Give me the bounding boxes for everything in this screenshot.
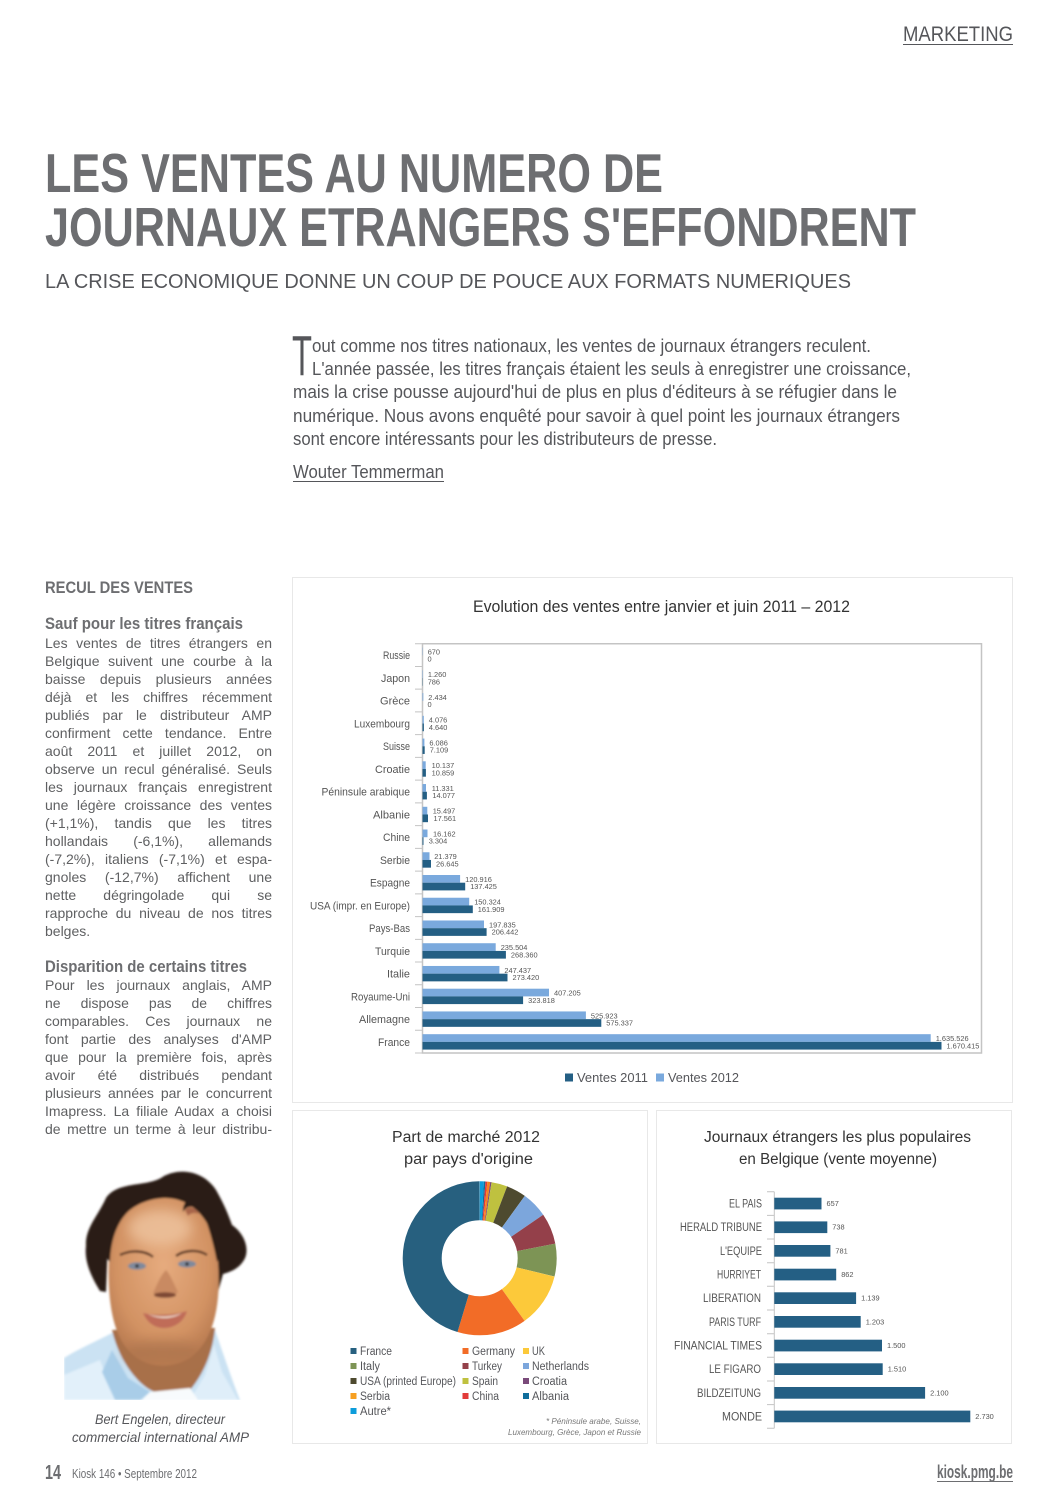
row: Espagne <box>370 875 497 891</box>
row: Peninsule arabique: Péninsule arabique <box>322 787 410 799</box>
bar chart: ventes moyennes: 1.203 <box>866 1317 884 1326</box>
text block: sauf pour les titres francais: août 2011 et juillet 2012, on <box>45 743 272 759</box>
bar chart: ventes moyennes <box>674 1192 994 1428</box>
text block: sauf pour les titres francais: (-7,2%), italiens (-7,1%) et espa- <box>45 851 272 867</box>
text block: sauf pour les titres francais: déjà et les chiffres récemment <box>45 689 272 705</box>
text block: sauf pour les titres francais: Belgique suivent une courbe à la <box>45 653 272 669</box>
bar chart: ventes moyennes: 1.500 <box>887 1341 906 1350</box>
subheading: disparition de certains titres: Disparition de certains titres <box>45 957 247 976</box>
portrait photo <box>64 1172 247 1400</box>
chart title: Evolution des ventes entre janvier et juin 2011 – 2012 <box>473 598 850 616</box>
shirt <box>64 1330 240 1400</box>
row: Luxembourg: 4.076 <box>429 716 447 725</box>
row: Suisse: 6.086 <box>429 738 448 747</box>
row: USA <box>310 898 505 914</box>
footer: website link: kiosk.pmg.be <box>937 1462 1013 1482</box>
row: Albanie: Albanie <box>373 809 410 821</box>
row: Allemagne: 575.337 <box>606 1019 633 1028</box>
bar chart: ventes moyennes: 781 <box>835 1246 848 1255</box>
row: Turquie: Turquie <box>375 946 410 958</box>
footnote <box>508 1416 641 1437</box>
text block: sauf pour les titres francais: belges. <box>45 923 90 939</box>
row: Croatie: Croatie <box>375 764 410 776</box>
photo caption: commercial international AMP <box>72 1429 250 1445</box>
subtitle: LA CRISE ECONOMIQUE DONNE UN COUP DE POUCE AUX FORMATS NUMERIQUES <box>45 270 851 293</box>
donut legend: USA (printed Europe) <box>360 1376 456 1388</box>
row: Allemagne <box>359 1011 633 1028</box>
footer: page number and issue <box>45 1462 197 1484</box>
row: Croatie: 10.859 <box>432 768 454 777</box>
nose <box>154 1270 178 1294</box>
row: Japon <box>381 670 446 686</box>
panel: evolution des ventes <box>292 578 1012 1102</box>
row: Grece: 2.434 <box>428 693 447 702</box>
panel: part de marche <box>292 1110 648 1444</box>
text block: sauf pour les titres francais: les journaux français enregistrent <box>45 779 272 795</box>
row: Turquie: 235.504 <box>501 943 527 952</box>
row: Croatie <box>375 761 454 777</box>
text block: disparition de certains titres: ne dispose pas de chiffres <box>45 995 272 1011</box>
text block: sauf pour les titres francais: baisse depuis plusieurs années <box>45 671 272 687</box>
row: Italie: 273.420 <box>512 973 539 982</box>
row: Serbie <box>380 852 459 868</box>
photo caption <box>72 1411 250 1445</box>
chart title: Journaux étrangers les plus populaires <box>704 1129 971 1146</box>
intro paragraph: mais la crise pousse aujourd'hui de plus en plus d'éditeurs à se réfugier dans le <box>293 381 897 402</box>
text block: sauf pour les titres francais: observe un recul généralisé. Seuls <box>45 761 272 777</box>
text block: disparition de certains titres: plusieurs années par le concurrent <box>45 1085 272 1101</box>
text block: sauf pour les titres francais: rapproche du niveau de nos titres <box>45 905 272 921</box>
bar chart: ventes moyennes: FINANCIAL TIMES <box>674 1340 762 1352</box>
row: Japon: 786 <box>428 677 440 686</box>
row: Peninsule arabique: 14.077 <box>432 791 455 800</box>
subheading: sauf pour les titres francais: Sauf pour les titres français <box>45 614 243 633</box>
row: Espagne: 120.916 <box>465 875 492 884</box>
donut legend: Turkey <box>472 1361 502 1373</box>
text block: disparition de certains titres: que pour la première fois, après <box>45 1049 272 1065</box>
chart legend <box>565 1070 739 1085</box>
chart title: Part de marché 2012 <box>392 1129 540 1146</box>
row: Royaume-Uni: Royaume-Uni <box>351 991 410 1003</box>
footnote: Luxembourg, Grèce, Japon et Russie <box>508 1427 641 1437</box>
donut legend: Italy <box>360 1361 380 1373</box>
bar chart: ventes moyennes: 738 <box>832 1223 845 1232</box>
intro paragraph: L'année passée, les titres français étaient les seuls à enregistrer une croissance, <box>312 358 911 379</box>
author byline: Wouter Temmerman <box>293 461 444 482</box>
row: Royaume-Uni: 407.205 <box>554 989 581 998</box>
panel: journaux les plus populaires <box>656 1110 1012 1444</box>
donut legend: Albania <box>532 1391 570 1403</box>
row: Suisse: Suisse <box>383 741 410 753</box>
chart title: en Belgique (vente moyenne) <box>739 1151 937 1168</box>
row: Espagne: 137.425 <box>470 882 497 891</box>
row: Turquie: 268.360 <box>511 950 538 959</box>
bar chart: ventes moyennes: EL PAIS <box>729 1198 762 1210</box>
text block: sauf pour les titres francais: gnoles (-12,7%) affichent une <box>45 869 272 885</box>
text block: disparition de certains titres: font partie des analyses d'AMP <box>45 1031 272 1047</box>
row: France: France <box>378 1037 410 1049</box>
mouth <box>143 1311 187 1328</box>
text block: sauf pour les titres francais: une légère croissance des ventes <box>45 797 272 813</box>
bar chart: ventes moyennes: HURRIYET <box>717 1270 761 1282</box>
row: Grece: Grèce <box>380 696 410 708</box>
row: Russie <box>383 648 440 664</box>
row: Peninsule arabique: 11.331 <box>432 784 454 793</box>
row: Japon: 1.260 <box>428 670 446 679</box>
bar chart: ventes moyennes: 2.730 <box>975 1412 994 1421</box>
footer: page number and issue: 14 <box>45 1462 62 1484</box>
text block: sauf pour les titres francais: hollandais (-6,1%), allemands <box>45 833 272 849</box>
row: Serbie: Serbie <box>380 855 410 867</box>
row: Pays-Bas <box>369 920 518 937</box>
text block: disparition de certains titres: de mettre un terme à leur distribu- <box>45 1121 272 1137</box>
row: Royaume-Uni: 323.818 <box>528 996 555 1005</box>
text block: disparition de certains titres: avoir été distribués pendant <box>45 1067 272 1083</box>
text block: sauf pour les titres francais: (+1,1%), tandis que les titres <box>45 815 272 831</box>
row: Chine: 16.162 <box>433 829 456 838</box>
bar chart: ventes par pays <box>310 644 982 1053</box>
text block: sauf pour les titres francais: nette dégringolade qui se <box>45 887 272 903</box>
hair <box>86 1172 247 1292</box>
donut legend <box>350 1346 589 1418</box>
donut legend: Netherlands <box>532 1361 589 1373</box>
row: Allemagne: Allemagne <box>359 1014 410 1026</box>
chart legend: Ventes 2011 <box>577 1070 648 1085</box>
donut chart <box>422 1201 537 1316</box>
eyes <box>128 1262 146 1270</box>
row: Luxembourg: 4.640 <box>429 723 447 732</box>
footnote: * Péninsule arabe, Suisse, <box>546 1416 641 1426</box>
intro paragraph: out comme nos titres nationaux, les ventes de journaux étrangers reculent. <box>312 335 871 356</box>
row: France <box>378 1034 979 1050</box>
row: Chine <box>383 829 456 846</box>
neck <box>112 1328 215 1392</box>
row: Chine: 3.304 <box>429 837 447 846</box>
row: USA: 161.909 <box>478 905 505 914</box>
row: Italie: Italie <box>387 969 410 981</box>
row: Pays-Bas: Pays-Bas <box>369 923 410 935</box>
row: Croatie: 10.137 <box>432 761 454 770</box>
row: Peninsule arabique <box>322 784 455 800</box>
row: Grece: 0 <box>428 700 432 709</box>
row: Turquie <box>375 943 538 959</box>
row: Japon: Japon <box>381 673 410 685</box>
intro paragraph <box>292 324 911 449</box>
row: Royaume-Uni <box>351 989 581 1005</box>
row: USA: USA (impr. en Europe) <box>310 900 410 912</box>
bar chart: ventes moyennes: LIBERATION <box>703 1293 761 1305</box>
donut legend: Autre* <box>360 1406 392 1418</box>
donut legend: Germany <box>472 1346 515 1358</box>
row: Suisse <box>383 738 448 755</box>
row: USA: 150.324 <box>474 898 501 907</box>
bar chart: ventes moyennes: 862 <box>841 1270 854 1279</box>
chart title <box>704 1129 971 1168</box>
photo caption: Bert Engelen, directeur <box>95 1411 226 1427</box>
row: Russie: Russie <box>383 650 410 662</box>
row: Allemagne: 525.923 <box>591 1011 618 1020</box>
text block: sauf pour les titres francais: publiés par le distributeur AMP <box>45 707 272 723</box>
intro paragraph: T <box>292 324 312 388</box>
row: Pays-Bas: 197.835 <box>489 920 516 929</box>
row: Italie: 247.437 <box>504 966 531 975</box>
row: Serbie: 21.379 <box>434 852 457 861</box>
row: France: 1.635.526 <box>936 1034 969 1043</box>
text block: disparition de certains titres: comparables. Ces journaux ne <box>45 1013 272 1029</box>
row: Russie: 0 <box>428 655 432 664</box>
donut legend: China <box>472 1391 500 1403</box>
bar chart: ventes moyennes: 2.100 <box>930 1388 949 1397</box>
row: Albanie <box>373 807 456 823</box>
row: Espagne: Espagne <box>370 878 410 890</box>
chart title: par pays d'origine <box>404 1151 533 1168</box>
section label: marketing: MARKETING <box>903 23 1013 46</box>
row: Chine: Chine <box>383 832 410 844</box>
bar chart: ventes moyennes: 1.510 <box>888 1365 906 1374</box>
row: Italie <box>387 966 539 982</box>
donut legend: Spain <box>472 1376 498 1388</box>
donut legend: Croatia <box>532 1376 568 1388</box>
text block: disparition de certains titres <box>45 977 272 1137</box>
row: Serbie: 26.645 <box>436 859 459 868</box>
intro paragraph: numérique. Nous avons enquêté pour savoir à quel point les journaux étrangers <box>293 405 900 426</box>
text block: sauf pour les titres francais <box>45 635 272 939</box>
bar chart: ventes moyennes: MONDE <box>722 1411 762 1423</box>
row: Suisse: 7.109 <box>430 746 448 755</box>
title <box>45 142 916 258</box>
row: France: 1.670.415 <box>946 1041 979 1050</box>
bar chart: ventes moyennes: 657 <box>826 1199 839 1208</box>
intro paragraph: sont encore intéressants pour les distributeurs de presse. <box>293 428 717 449</box>
face <box>109 1198 219 1366</box>
row: Luxembourg <box>354 716 447 732</box>
row: Albanie: 17.561 <box>434 814 456 823</box>
row: Albanie: 15.497 <box>433 807 455 816</box>
bar chart: ventes moyennes: L'EQUIPE <box>720 1246 762 1258</box>
text block: sauf pour les titres francais: Les ventes de titres étrangers en <box>45 635 272 651</box>
text block: disparition de certains titres: Pour les journaux anglais, AMP <box>45 977 272 993</box>
row: Pays-Bas: 206.442 <box>492 928 518 937</box>
bar chart: ventes moyennes: HERALD TRIBUNE <box>680 1222 762 1234</box>
chart legend: Ventes 2012 <box>668 1070 739 1085</box>
text block: disparition de certains titres: Imapress. La filiale Audax a choisi <box>45 1103 272 1119</box>
text block: sauf pour les titres francais: confirment cette tendance. Entre <box>45 725 272 741</box>
bar chart: ventes moyennes: PARIS TURF <box>709 1317 761 1329</box>
bar chart: ventes moyennes: LE FIGARO <box>709 1364 761 1376</box>
title: LES VENTES AU NUMERO DE <box>45 142 663 204</box>
row: Luxembourg: Luxembourg <box>354 718 410 730</box>
bar chart: ventes moyennes: 1.139 <box>861 1294 880 1303</box>
hair curl on forehead <box>183 1196 221 1262</box>
footer: page number and issue: Kiosk 146 • Septembre 2012 <box>72 1466 197 1481</box>
row: Grece <box>380 693 447 709</box>
chart title <box>392 1129 540 1168</box>
heading: recul des ventes: RECUL DES VENTES <box>45 578 193 597</box>
donut legend: Serbia <box>360 1391 391 1403</box>
donut legend: UK <box>532 1346 545 1358</box>
brows <box>120 1251 153 1257</box>
row: Russie: 670 <box>428 648 440 657</box>
donut legend: France <box>360 1346 392 1358</box>
bar chart: ventes moyennes: BILDZEITUNG <box>697 1388 761 1400</box>
footer: website link <box>937 1462 1013 1482</box>
